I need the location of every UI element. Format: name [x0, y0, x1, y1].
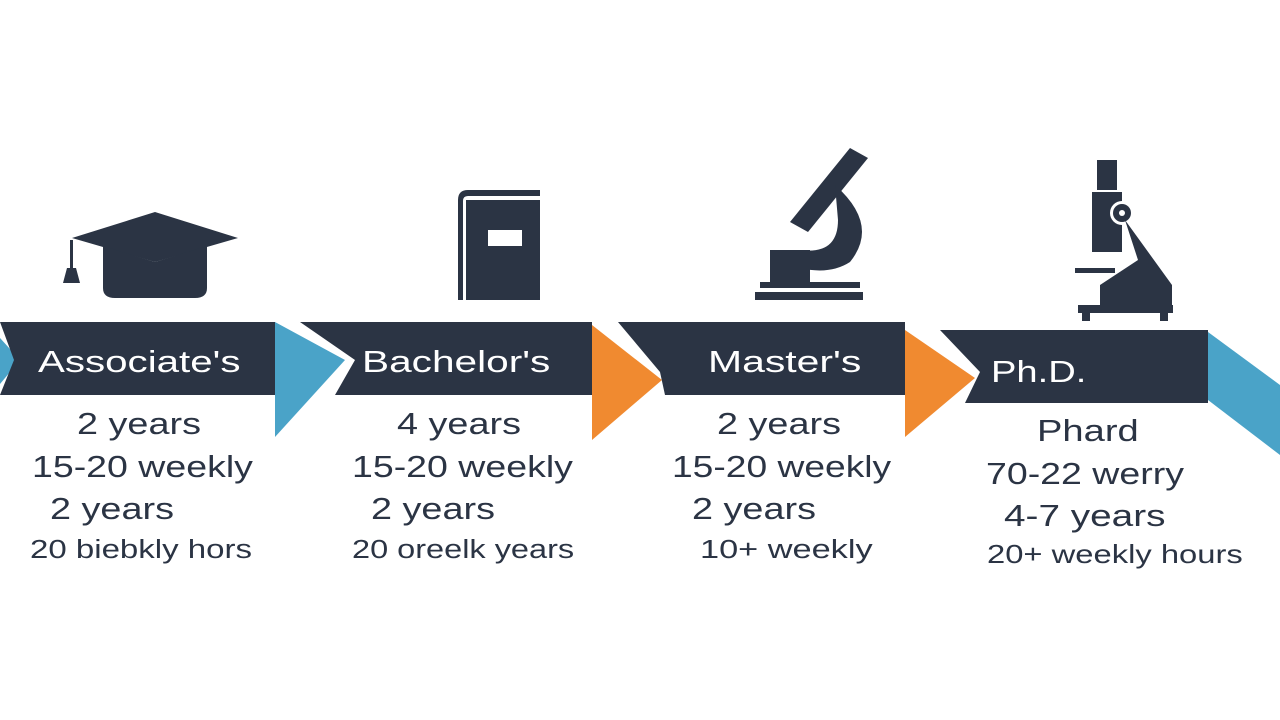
icon: graduation cap [63, 212, 238, 298]
icon: microscope [755, 148, 868, 300]
arrow: blue chevron right [1208, 332, 1280, 455]
banner: Ph.D.: Ph.D. [991, 355, 1086, 389]
text: Ph.D. details [986, 414, 1243, 569]
text: Bachelor's details: 4 years [397, 407, 521, 441]
text: Master's details: 15-20 weekly [672, 450, 892, 484]
icon: microscope 2 [1075, 160, 1173, 321]
text: Bachelor's details: 20 oreelk years [352, 535, 574, 564]
icon: book [458, 190, 540, 300]
text: Associate's details: 20 biebkly hors [30, 535, 252, 564]
text: Master's details [672, 407, 892, 564]
banner: Associate's [0, 322, 275, 395]
text: Ph.D. details: 70-22 werry [986, 457, 1185, 491]
text: Ph.D. details: Phard [1037, 414, 1139, 448]
banner: Bachelor's: Bachelor's [362, 344, 550, 379]
banner: Master's: Master's [708, 344, 861, 379]
text: Bachelor's details: 2 years [371, 492, 495, 526]
arrow: orange chevron 1 [592, 325, 662, 440]
text: Ph.D. details: 4-7 years [1004, 499, 1165, 533]
text: Master's details: 2 years [717, 407, 841, 441]
arrow: blue chevron 1 [275, 322, 345, 437]
text: Associate's details [30, 407, 254, 564]
banner: Associate's: Associate's [38, 344, 240, 379]
banner: Ph.D. [940, 330, 1208, 403]
text: Bachelor's details [352, 407, 574, 564]
text: Associate's details: 2 years [77, 407, 201, 441]
banner: Master's [618, 322, 905, 395]
banner: Bachelor's [300, 322, 592, 395]
text: Ph.D. details: 20+ weekly hours [987, 540, 1243, 569]
text: Associate's details: 2 years [50, 492, 174, 526]
arrow: left blue tip [0, 338, 20, 384]
text: Master's details: 2 years [692, 492, 816, 526]
text: Bachelor's details: 15-20 weekly [352, 450, 574, 484]
arrow: orange chevron 2 [905, 330, 975, 437]
text: Master's details: 10+ weekly [700, 535, 873, 564]
text: Associate's details: 15-20 weekly [32, 450, 254, 484]
